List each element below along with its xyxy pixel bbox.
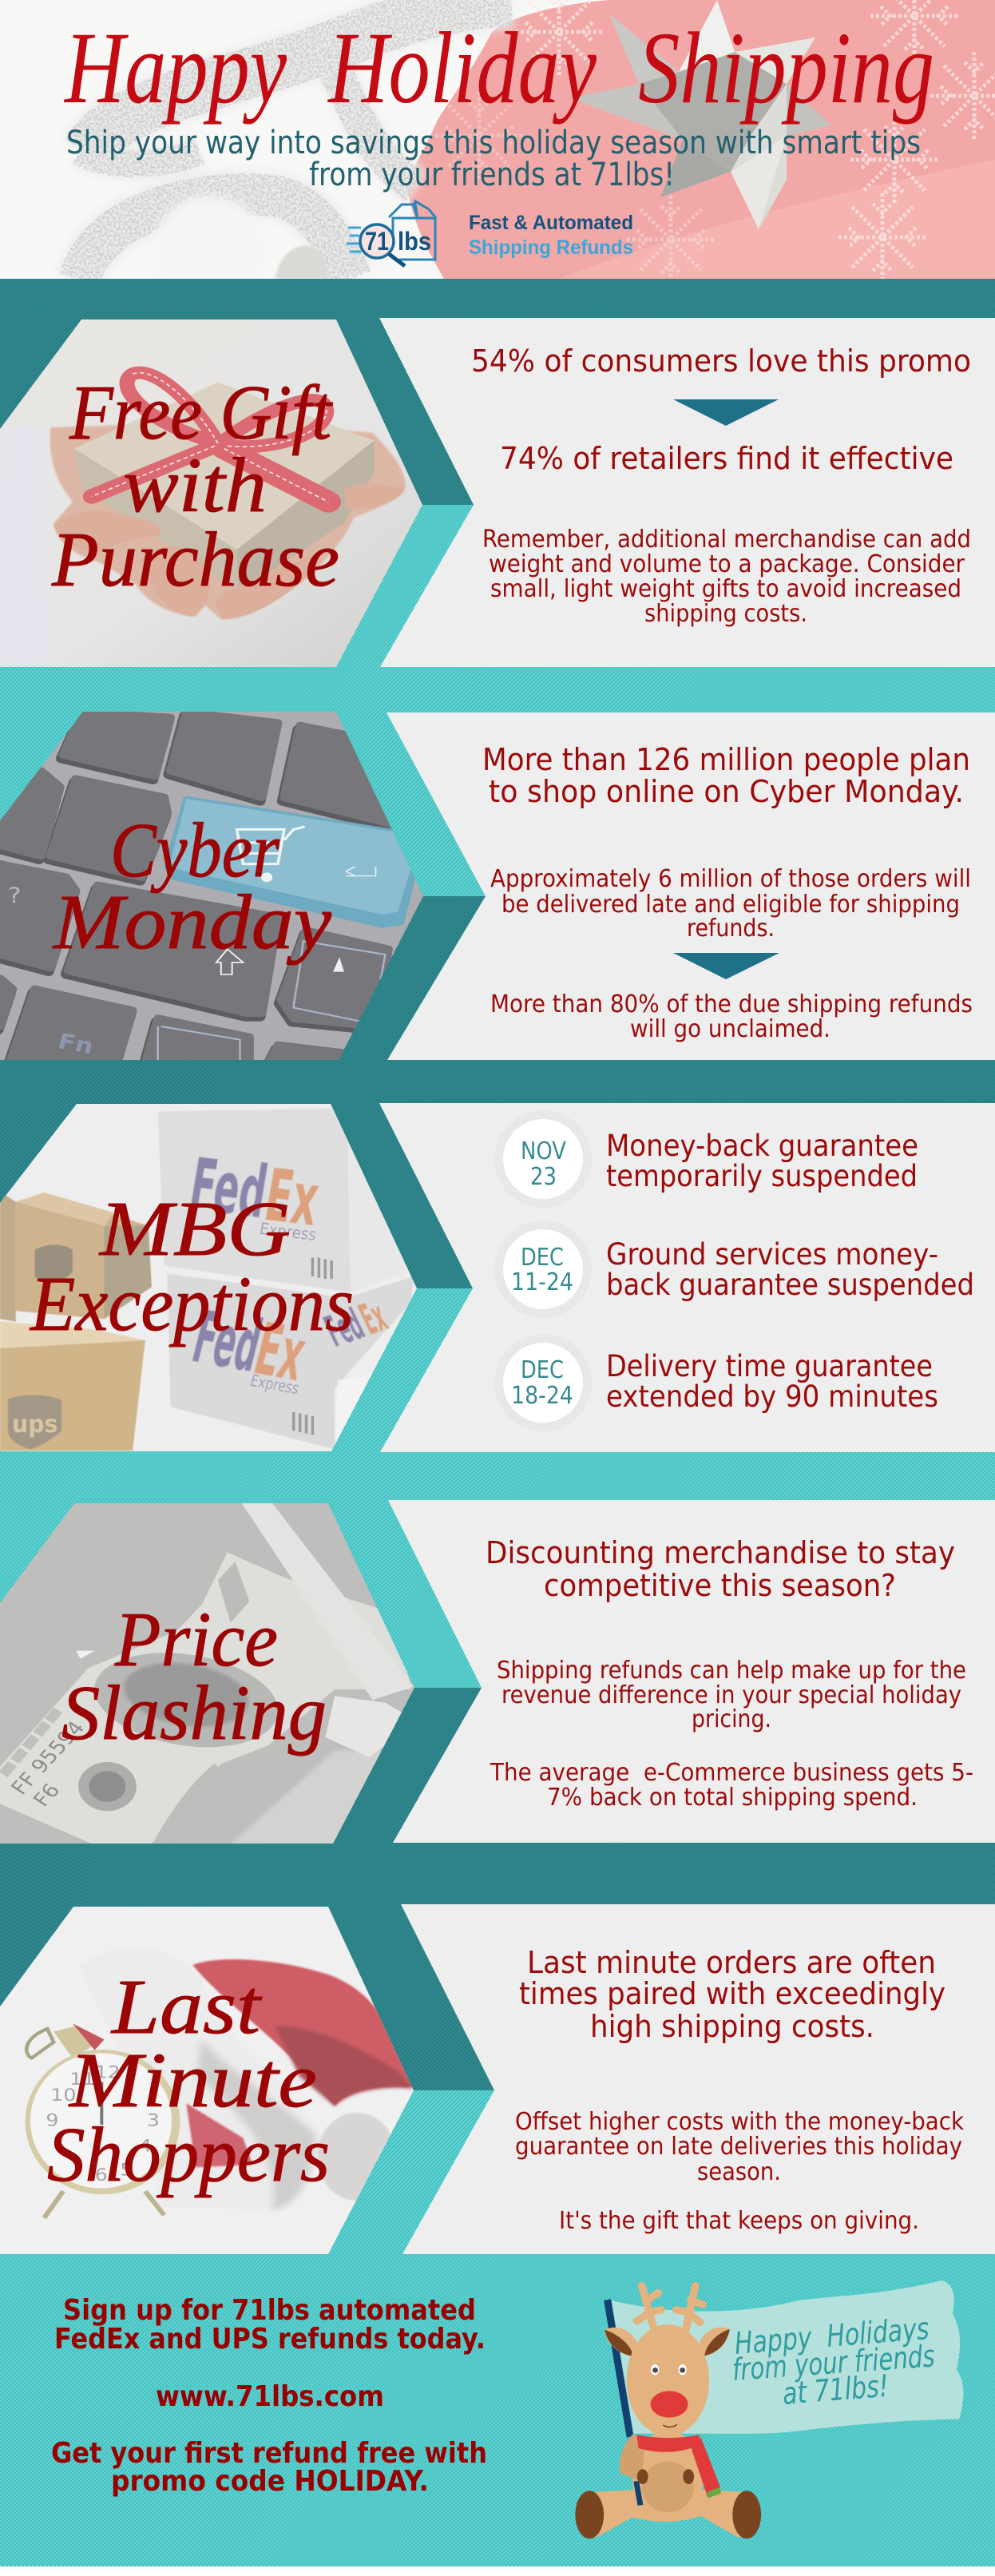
statement: last minute orders: times paired with exceedingly xyxy=(519,1976,945,2011)
photo: santa hat and alarm clock xyxy=(0,1907,414,2254)
logo: 71lbs: Shipping Refunds xyxy=(469,236,633,259)
paragraph: unclaimed xyxy=(490,990,973,1043)
footer call to action: Get your first refund free with xyxy=(51,2437,487,2470)
flag message: at 71lbs! xyxy=(781,2368,890,2411)
paragraph: offset costs: Offset higher costs with the money-back xyxy=(515,2108,965,2136)
stat: shoppers: to shop online on Cyber Monday. xyxy=(489,774,964,809)
paragraph: refunds: revenue difference in your special holiday xyxy=(501,1681,961,1709)
date item: dec 11-24: DEC xyxy=(521,1244,564,1272)
statement: last minute orders: high shipping costs. xyxy=(590,2009,874,2044)
date item: nov 23: temporarily suspended xyxy=(606,1159,918,1193)
heading: free gift with purchase: Free Gift xyxy=(69,370,334,456)
heading: last minute shoppers: Last xyxy=(110,1964,263,2050)
heading: last minute shoppers: Shoppers xyxy=(47,2112,330,2198)
paragraph: unclaimed: will go unclaimed. xyxy=(630,1015,830,1043)
subtitle: from your friends at 71lbs! xyxy=(309,157,675,193)
paragraph: offset costs xyxy=(515,2108,965,2186)
date item: dec 11-24: 11-24 xyxy=(511,1268,573,1296)
paragraph: offset costs: guarantee on late deliveries this holiday xyxy=(515,2133,962,2161)
photo: santa hat and alarm clock: 12 xyxy=(95,2062,121,2082)
panel: mbg exceptions xyxy=(0,1101,995,1456)
paragraph: unclaimed: More than 80% of the due shipping refunds xyxy=(490,990,973,1018)
header photo: tinsel, ornament, red wrapping and silver bow xyxy=(46,0,995,279)
heading: last minute shoppers: Minute xyxy=(68,2038,317,2124)
heading: free gift with purchase: with xyxy=(123,443,267,529)
logo: 71lbs xyxy=(347,201,633,266)
photo: scissors cutting a dollar bill: F6 xyxy=(29,1780,65,1811)
text panel xyxy=(388,1500,995,1843)
date item: nov 23: NOV xyxy=(521,1137,566,1165)
stat: consumers: 54% of consumers love this promo xyxy=(471,343,971,379)
heading: price slashing xyxy=(61,1597,327,1756)
footer call to action: FedEx and UPS refunds today. xyxy=(54,2323,486,2356)
flag banner xyxy=(612,2280,963,2434)
text panel xyxy=(379,1103,995,1452)
photo: santa hat and alarm clock: 6 xyxy=(95,2165,108,2185)
date item: dec 18-24: 18-24 xyxy=(511,1382,573,1410)
photo: santa hat and alarm clock: 5 xyxy=(120,2159,133,2180)
footer call to action xyxy=(51,2294,487,2498)
date item: dec 18-24: extended by 90 minutes xyxy=(606,1379,938,1414)
text panel xyxy=(387,712,995,1060)
logo: 71lbs: lbs xyxy=(398,227,431,256)
photo: santa hat and alarm clock: 11 xyxy=(69,2069,95,2089)
photo: hands holding gift xyxy=(0,320,422,667)
photo: keyboard with cart key: ? xyxy=(8,883,22,907)
header panel xyxy=(46,0,995,279)
photo: fedex and ups boxes: Ex xyxy=(352,1292,394,1344)
statement: last minute orders xyxy=(519,1945,945,2044)
paragraph: late orders: be delivered late and eligible for shipping xyxy=(501,891,960,919)
paragraph: late orders xyxy=(490,865,971,943)
heading: mbg exceptions: Exceptions xyxy=(29,1261,354,1348)
photo: santa hat and alarm clock: 4 xyxy=(139,2135,152,2156)
flag message xyxy=(731,2311,936,2411)
paragraph: refunds: pricing. xyxy=(692,1705,771,1733)
photo: keyboard with cart key: Fn xyxy=(56,1029,96,1059)
heading: cyber monday: Monday xyxy=(52,879,332,966)
photo: scissors cutting a dollar bill xyxy=(0,1498,495,1853)
panel: free gift with purchase xyxy=(0,316,995,671)
paragraph xyxy=(482,526,971,628)
date item: dec 18-24 xyxy=(494,1334,938,1431)
text panel xyxy=(379,318,995,667)
heading: mbg exceptions xyxy=(29,1186,354,1348)
reindeer with flag xyxy=(575,2280,963,2538)
photo: fedex and ups boxes xyxy=(0,1104,417,1451)
date item: dec 11-24 xyxy=(494,1221,974,1318)
footer call to action: Sign up for 71lbs automated xyxy=(63,2294,476,2327)
photo: fedex and ups boxes: ups xyxy=(12,1410,57,1438)
heading: price slashing: Slashing xyxy=(61,1670,327,1756)
date item: dec 18-24: Delivery time guarantee xyxy=(606,1349,933,1383)
paragraph: weight and volume to a package. Consider xyxy=(489,550,965,578)
photo: fedex and ups boxes: Fed xyxy=(184,1143,273,1235)
arrow down xyxy=(673,953,779,979)
photo: santa hat and alarm clock: 9 xyxy=(46,2110,58,2130)
logo: 71lbs: Fast & Automated xyxy=(469,212,633,234)
date item: dec 11-24: Ground services money- xyxy=(606,1237,938,1272)
date item: nov 23: 23 xyxy=(530,1163,557,1191)
arrow down xyxy=(673,399,779,426)
question: competitive this season? xyxy=(544,1568,896,1603)
photo: scissors cutting a dollar bill: FF 95594 xyxy=(6,1717,90,1799)
date item: dec 18-24: DEC xyxy=(521,1356,564,1384)
paragraph: late orders: refunds. xyxy=(687,915,775,943)
panel: cyber monday xyxy=(0,707,995,1067)
heading: free gift with purchase: Purchase xyxy=(51,517,339,603)
subtitle xyxy=(66,125,921,193)
date item: nov 23 xyxy=(494,1110,918,1208)
paragraph: shipping costs. xyxy=(644,600,807,628)
heading: cyber monday: Cyber xyxy=(110,808,280,894)
stat: shoppers: More than 126 million people plan xyxy=(482,742,970,777)
closing line: It's the gift that keeps on giving. xyxy=(559,2207,919,2235)
paragraph: small, light weight gifts to avoid increased xyxy=(490,575,961,603)
heading: price slashing: Price xyxy=(114,1597,278,1683)
heading: last minute shoppers xyxy=(47,1964,330,2198)
photo: santa hat and alarm clock: 10 xyxy=(50,2085,76,2105)
paragraph: average xyxy=(490,1759,973,1812)
photo: fedex and ups boxes: Fed xyxy=(317,1300,371,1356)
photo: fedex and ups boxes: Ex xyxy=(260,1153,324,1243)
heading: mbg exceptions: MBG xyxy=(98,1186,291,1272)
footer call to action: www.71lbs.com xyxy=(156,2380,384,2413)
statement: last minute orders: Last minute orders are often xyxy=(527,1945,936,1980)
reindeer xyxy=(575,2286,761,2538)
stat: retailers: 74% of retailers find it effective xyxy=(500,441,953,476)
heading: free gift with purchase xyxy=(51,370,339,603)
flag message: Happy Holidays xyxy=(733,2311,930,2361)
paragraph: refunds: Shipping refunds can help make up for the xyxy=(497,1657,966,1685)
photo: keyboard with cart key xyxy=(0,712,423,1060)
paragraph: refunds xyxy=(497,1657,966,1733)
heading: cyber monday xyxy=(52,808,332,966)
photo: fedex and ups boxes: Ex xyxy=(247,1308,314,1398)
photo: santa hat and alarm clock: 3 xyxy=(147,2110,160,2130)
paragraph: offset costs: season. xyxy=(697,2158,781,2186)
question xyxy=(486,1535,955,1603)
panel: price slashing xyxy=(0,1498,995,1853)
footer call to action: promo code HOLIDAY. xyxy=(111,2465,429,2498)
photo: fedex and ups boxes: Express xyxy=(248,1372,301,1399)
paragraph: late orders: Approximately 6 million of those orders will xyxy=(490,865,971,893)
text panel xyxy=(401,1904,995,2254)
photo: fedex and ups boxes: Fed xyxy=(185,1296,269,1389)
flag message: from your friends xyxy=(731,2338,936,2387)
photo: fedex and ups boxes: Express xyxy=(258,1221,318,1244)
stat: shoppers xyxy=(482,742,970,809)
logo: 71lbs: 71 xyxy=(365,227,389,256)
paragraph: average: 7% back on total shipping spend. xyxy=(547,1784,918,1812)
panel: last minute shoppers xyxy=(0,1901,995,2256)
date item: nov 23: Money-back guarantee xyxy=(606,1129,918,1163)
question: Discounting merchandise to stay xyxy=(486,1535,955,1570)
